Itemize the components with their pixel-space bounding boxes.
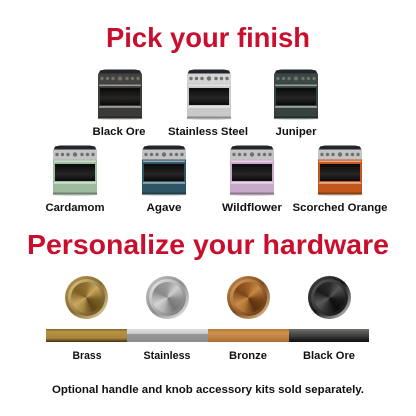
range: Black Ore — [97, 70, 143, 120]
handle bar — [46, 329, 369, 342]
range: Agave — [141, 146, 187, 196]
knob: Stainless — [146, 276, 189, 319]
range: Juniper — [273, 70, 319, 120]
label: Wildflower: Wildflower — [222, 202, 283, 214]
range: Scorched Orange — [317, 146, 363, 196]
knob: Bronze — [227, 276, 270, 319]
range: Cardamom — [52, 146, 98, 196]
label: Black Ore: Black Ore — [92, 126, 146, 138]
label: Stainless Steel: Stainless Steel — [168, 126, 248, 138]
label: Cardamom: Cardamom — [46, 202, 105, 214]
label: Juniper: Juniper — [276, 126, 317, 138]
knob: Black Ore — [308, 276, 351, 319]
range: Stainless Steel — [186, 70, 232, 120]
label: Bronze: Bronze — [229, 350, 267, 362]
range: Wildflower — [229, 146, 275, 196]
heading: Personalize your hardware: Personalize your hardware — [27, 229, 389, 260]
label: Scorched Orange: Scorched Orange — [292, 202, 388, 214]
label: Brass: Brass — [72, 350, 102, 362]
footnote: Optional handle and knob accessory kits sold separately. — [52, 384, 364, 396]
label: Stainless: Stainless — [144, 350, 190, 362]
label: Black Ore finish: Black Ore — [303, 350, 355, 362]
knob: Brass — [65, 276, 108, 319]
label: Agave: Agave — [146, 202, 182, 214]
title: Pick your finish: Pick your finish — [106, 22, 310, 53]
